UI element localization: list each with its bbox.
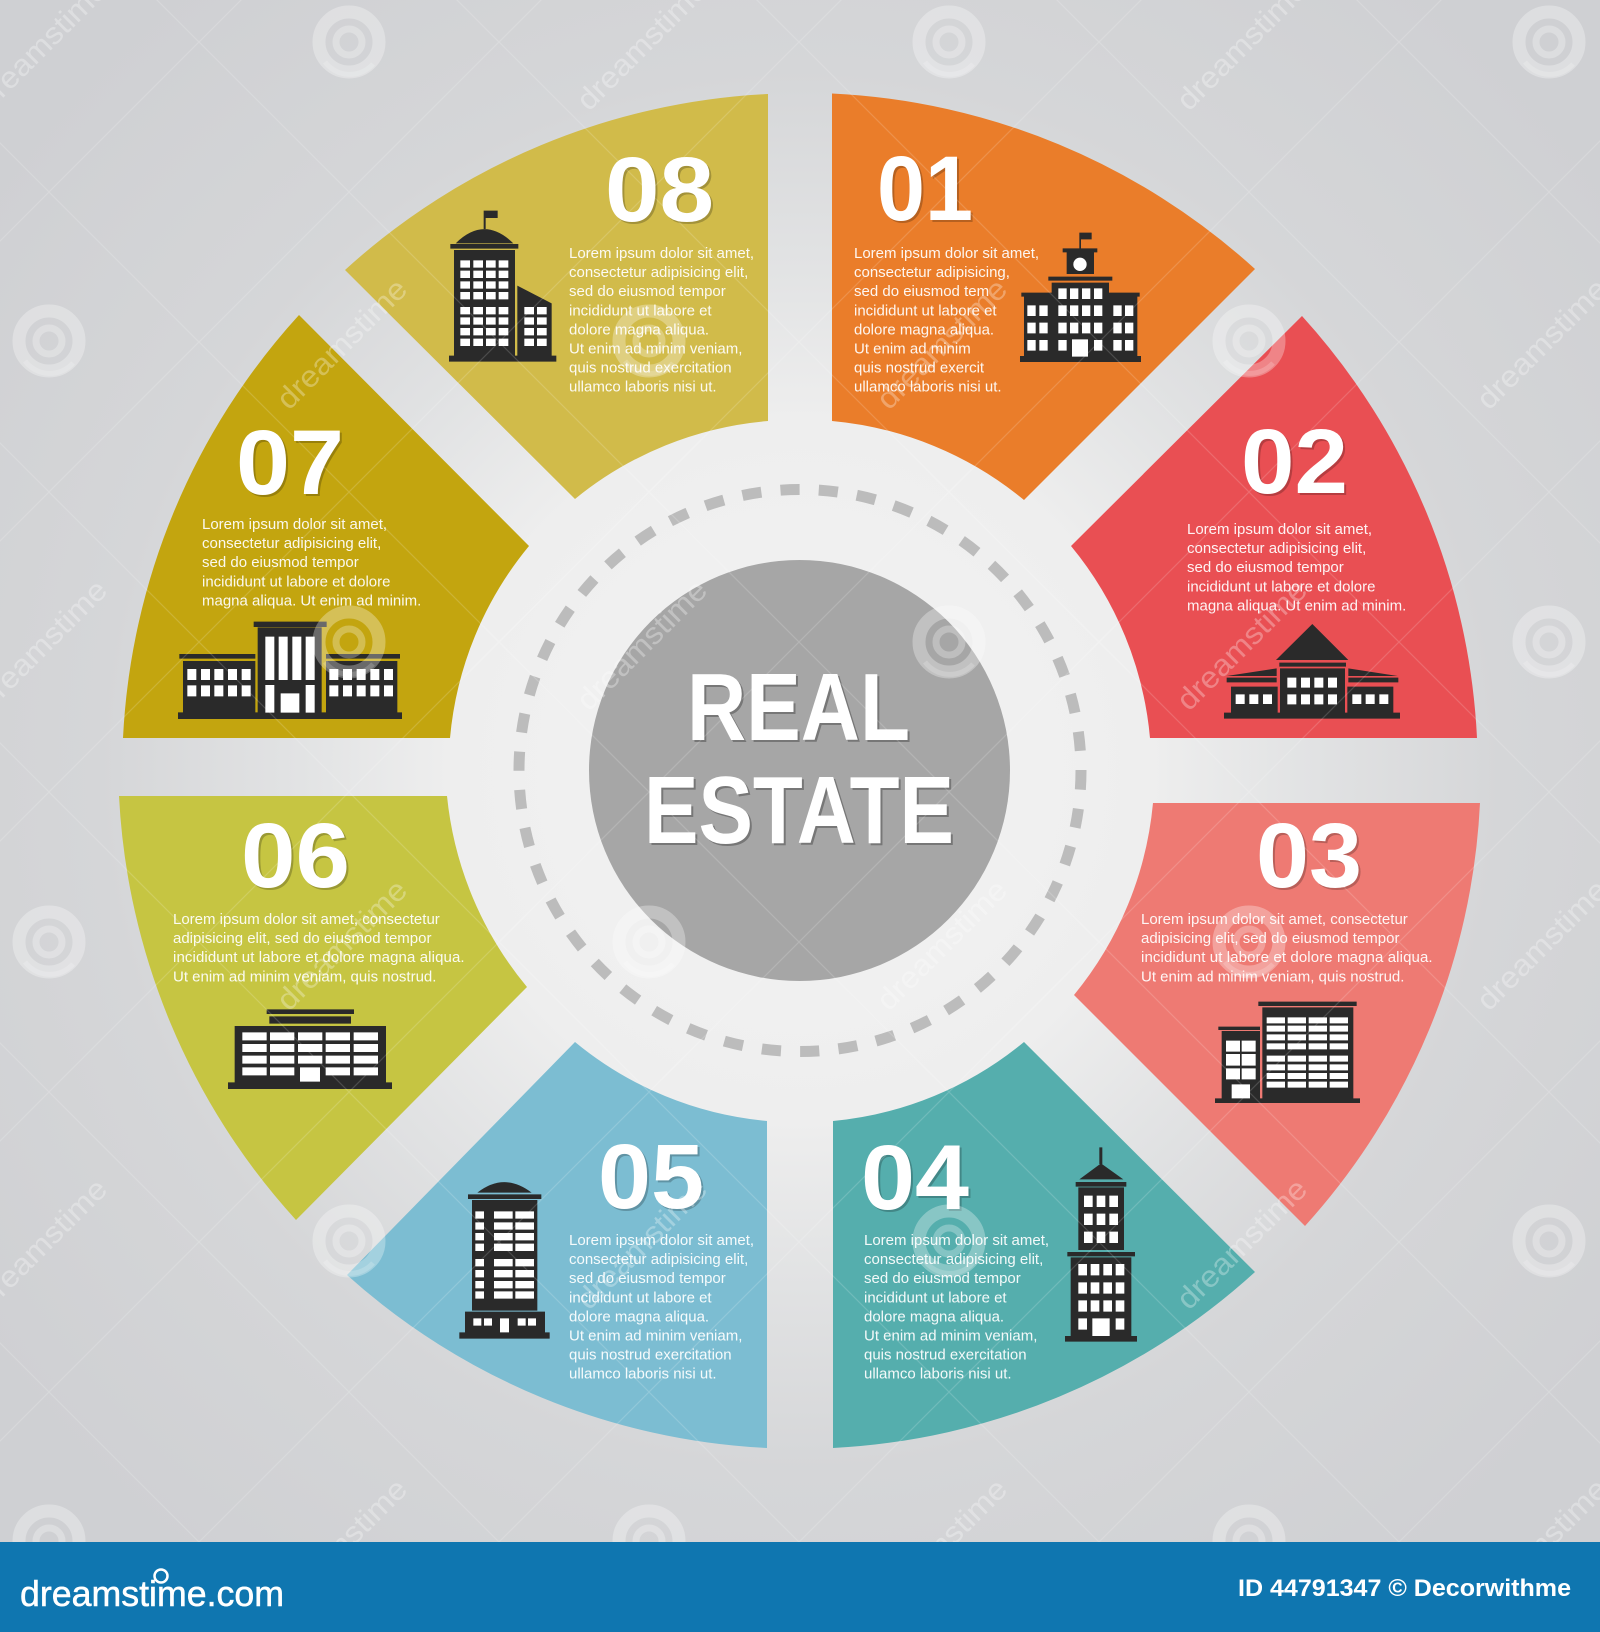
text block 04: consectetur adipisicing elit,	[864, 1251, 1043, 1268]
panel: 05	[347, 1042, 767, 1448]
title: REAL	[687, 654, 910, 761]
icon: domed tower with flag and annex	[449, 211, 556, 362]
number 02: 02	[1241, 411, 1348, 513]
icon: domed tower block	[459, 1182, 550, 1339]
text block 01: sed do eiusmod tem	[854, 283, 989, 300]
text block 03: Lorem ipsum dolor sit amet, consectetur	[1141, 911, 1408, 928]
text block 02: consectetur adipisicing elit,	[1187, 540, 1366, 557]
text block 03: incididunt ut labore et dolore magna aliqua.	[1141, 949, 1433, 966]
panel: 04	[833, 1042, 1255, 1448]
watermark text: dreamstime	[1171, 574, 1314, 717]
number 07: 07	[236, 412, 344, 514]
footer bar	[0, 1542, 1600, 1632]
text block 04: ullamco laboris nisi ut.	[864, 1366, 1012, 1383]
text block 05: Ut enim ad minim veniam,	[569, 1328, 742, 1344]
number 06: 06	[241, 805, 350, 907]
text block 05: dolore magna aliqua.	[569, 1308, 709, 1325]
text block 08: sed do eiusmod tempor	[569, 283, 726, 300]
panel: 01	[832, 94, 1255, 500]
text block 08: ullamco laboris nisi ut.	[569, 379, 717, 396]
text block 05: ullamco laboris nisi ut.	[569, 1366, 717, 1383]
text block 08: quis nostrud exercitation	[569, 360, 732, 377]
text block 01: quis nostrud exercit	[854, 360, 985, 377]
panel: 02	[1071, 316, 1477, 738]
text block 07: magna aliqua. Ut enim ad minim.	[202, 592, 421, 609]
text block 06: adipisicing elit, sed do eiusmod tempor	[173, 930, 431, 947]
text block 02: sed do eiusmod tempor	[1187, 559, 1344, 576]
watermark text: dreamstime	[571, 1173, 714, 1316]
icon: tall tower with spire	[1065, 1147, 1137, 1342]
text block 03: adipisicing elit, sed do eiusmod tempor	[1141, 930, 1399, 947]
text block 01: consectetur adipisicing,	[854, 264, 1010, 281]
number 05: 05	[598, 1126, 704, 1228]
text block 04: Lorem ipsum dolor sit amet,	[864, 1232, 1049, 1249]
watermark text: dreamstime	[1171, 1173, 1314, 1316]
text block 04: dolore magna aliqua.	[864, 1308, 1004, 1325]
watermark text: dreamstime	[871, 874, 1014, 1017]
text block 03: Ut enim ad minim veniam, quis nostrud.	[1141, 968, 1404, 985]
icon: wide office block	[228, 1009, 392, 1089]
text block 08: incididunt ut labore et	[569, 302, 712, 319]
panel: 08	[345, 94, 768, 499]
text block 07: Lorem ipsum dolor sit amet,	[202, 516, 387, 533]
number 04: 04	[861, 1127, 969, 1229]
watermark text: dreamstime	[871, 1473, 1014, 1616]
text block 08: consectetur adipisicing elit,	[569, 264, 748, 281]
text block 08: dolore magna aliqua.	[569, 321, 709, 338]
text block 07: consectetur adipisicing elit,	[202, 535, 381, 552]
text block 02: incididunt ut labore et dolore	[1187, 578, 1375, 595]
text block 07: incididunt ut labore et dolore	[202, 573, 390, 590]
text block 08: Ut enim ad minim veniam,	[569, 340, 742, 358]
text block 01: dolore magna aliqua.	[854, 321, 994, 338]
centre circle with title	[589, 560, 1010, 981]
title: ESTATE	[644, 757, 954, 864]
text block 02: magna aliqua. Ut enim ad minim.	[1187, 597, 1406, 614]
watermark text: dreamstime	[871, 273, 1014, 416]
number 08: 08	[605, 139, 714, 241]
number 01: 01	[877, 138, 973, 240]
text block 01: Lorem ipsum dolor sit amet,	[854, 245, 1039, 262]
text block 05: quis nostrud exercitation	[569, 1347, 732, 1364]
icon: school building with clock and flag	[1020, 233, 1141, 362]
footer logo: dreamstime.com	[20, 1573, 284, 1614]
panel: 03	[1074, 803, 1480, 1226]
text block 01: Ut enim ad minim	[854, 340, 971, 358]
text block 05: incididunt ut labore et	[569, 1289, 712, 1306]
text block 04: sed do eiusmod tempor	[864, 1270, 1021, 1287]
panel: 07	[123, 315, 529, 738]
icon: low hall with pitched roof	[1224, 624, 1400, 719]
panel: 06	[119, 796, 527, 1220]
text block 08: Lorem ipsum dolor sit amet,	[569, 245, 754, 262]
watermark text: dreamstime	[271, 273, 414, 416]
text block 07: sed do eiusmod tempor	[202, 554, 359, 571]
text block 05: consectetur adipisicing elit,	[569, 1251, 748, 1268]
text block 06: incididunt ut labore et dolore magna aliqua.	[173, 949, 465, 966]
text block 04: incididunt ut labore et	[864, 1289, 1007, 1306]
text block 05: Lorem ipsum dolor sit amet,	[569, 1232, 754, 1249]
watermark text: dreamstime	[271, 1473, 414, 1616]
text block 04: Ut enim ad minim veniam,	[864, 1328, 1037, 1344]
watermark text: dreamstime	[271, 874, 414, 1017]
text block 01: ullamco laboris nisi ut.	[854, 379, 1002, 396]
text block 04: quis nostrud exercitation	[864, 1347, 1027, 1364]
dashed ring	[519, 490, 1081, 1052]
number 03: 03	[1256, 805, 1362, 907]
text block 01: incididunt ut labore et	[854, 302, 997, 319]
text block 06: Lorem ipsum dolor sit amet, consectetur	[173, 911, 440, 928]
icon: three-part campus building	[178, 622, 402, 719]
icon: two office blocks	[1215, 1002, 1360, 1103]
text block 02: Lorem ipsum dolor sit amet,	[1187, 521, 1372, 538]
footer credit: ID 44791347 © Decorwithme	[1238, 1575, 1571, 1602]
watermark text: dreamstime	[571, 574, 714, 717]
text block 05: sed do eiusmod tempor	[569, 1270, 726, 1287]
text block 06: Ut enim ad minim veniam, quis nostrud.	[173, 968, 436, 985]
title	[644, 654, 954, 864]
